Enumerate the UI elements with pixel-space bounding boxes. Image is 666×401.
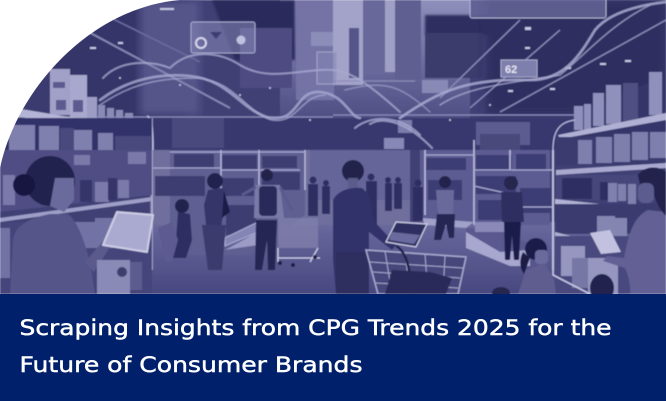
floating product tablet xyxy=(103,212,153,252)
man pushing shopping trolley xyxy=(333,160,466,294)
distant aisle shelving xyxy=(150,118,553,270)
woman browsing aisle xyxy=(434,176,455,240)
holographic data panels: 62 xyxy=(505,64,517,76)
girl with ponytail xyxy=(492,238,614,294)
woman with backpack xyxy=(501,176,524,260)
right shelf with packaged goods xyxy=(553,72,666,294)
shopping trolley xyxy=(366,246,466,294)
hero illustration: futuristic supermarket with shoppers xyxy=(0,0,666,294)
glowing data streams xyxy=(100,2,666,148)
child and woman with bag xyxy=(158,173,230,270)
shopper with tablet, right foreground xyxy=(590,167,666,294)
man with backpack and trolley xyxy=(242,169,320,270)
store background xyxy=(0,0,666,294)
title xyxy=(20,316,612,378)
city towers and ceiling xyxy=(18,0,666,123)
held tablet xyxy=(590,230,621,254)
left shelf with cereal boxes xyxy=(0,69,153,294)
title: Future of Consumer Brands xyxy=(20,353,362,378)
holographic data panels xyxy=(191,0,606,149)
floating tablet xyxy=(386,222,427,247)
title: Scraping Insights from CPG Trends 2025 for the xyxy=(20,316,612,341)
title banner xyxy=(0,294,666,401)
shopper with tablet, left foreground xyxy=(10,156,153,294)
distant shoppers xyxy=(308,174,423,225)
